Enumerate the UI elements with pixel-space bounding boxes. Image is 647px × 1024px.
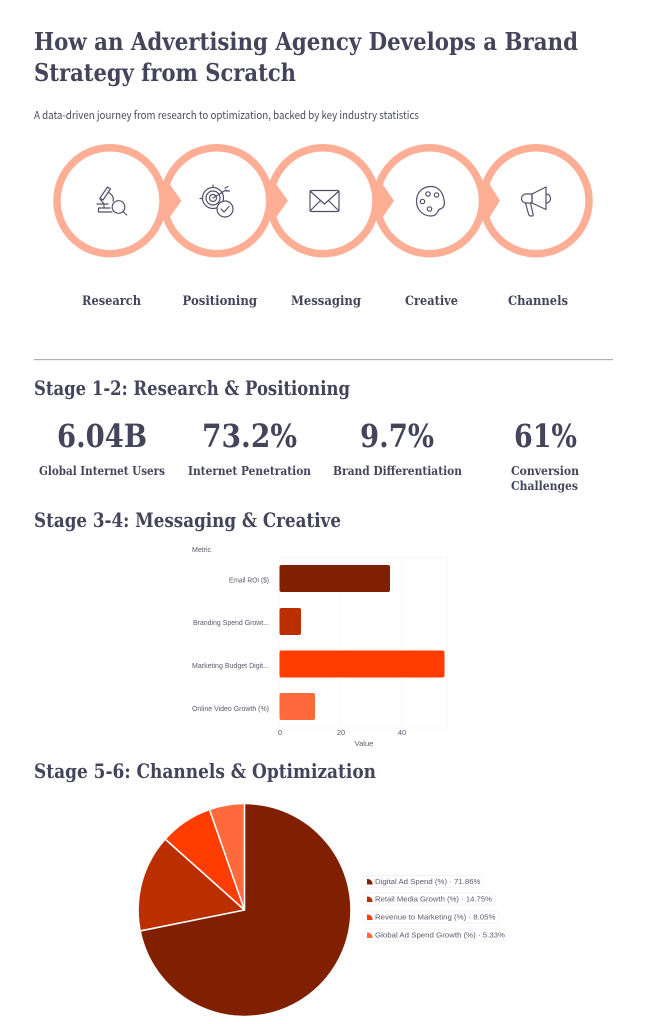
stat: conversion challenges: Challenges	[511, 479, 578, 493]
category labels: Branding Spend Growt...	[193, 620, 269, 627]
stat: brand differentiation: Brand Differentiation	[333, 464, 462, 478]
axis title: metric: Metric	[192, 547, 212, 554]
value axis: Value	[355, 739, 373, 748]
value axis: 0	[278, 728, 282, 737]
legend: global ad spend growth: Global Ad Spend Growth (%) · 5.33%	[375, 931, 505, 940]
title: Strategy from Scratch	[34, 58, 296, 87]
category labels: Online Video Growth (%)	[192, 706, 269, 713]
title: How an Advertising Agency Develops a Brand	[34, 27, 578, 56]
heading: stage 1-2: Stage 1-2: Research & Positioning	[34, 377, 350, 400]
arrow 4	[483, 184, 500, 218]
legend	[362, 876, 510, 941]
legend: digital ad spend	[362, 876, 484, 888]
icon: target with check	[200, 185, 233, 217]
ring: creative	[376, 148, 482, 254]
ring: research	[57, 148, 163, 254]
legend: global ad spend growth	[362, 929, 510, 941]
category labels: Email ROI ($)	[229, 578, 269, 584]
stat: conversion challenges: 61%	[514, 417, 577, 455]
ring: channels	[483, 148, 589, 254]
pie chart	[139, 804, 350, 1016]
icon: envelope	[310, 190, 339, 212]
process flow	[57, 148, 589, 309]
heading: stage 5-6: Stage 5-6: Channels & Optimization	[34, 760, 376, 783]
stat: internet penetration	[188, 417, 311, 478]
arrow 1	[163, 184, 182, 218]
legend: revenue to marketing: Revenue to Marketing (%) · 8.05%	[375, 913, 496, 922]
subtitle: A data-driven journey from research to optimization, backed by key industry statistics	[34, 107, 419, 123]
legend: retail media growth	[362, 893, 496, 905]
step labels: Positioning	[182, 294, 257, 309]
stat: conversion challenges	[511, 417, 579, 493]
stat: global internet users	[39, 417, 165, 478]
heading: stage 3-4: Stage 3-4: Messaging & Creative	[34, 509, 341, 532]
step labels: Messaging	[291, 294, 361, 309]
bar: branding spend	[280, 608, 301, 635]
stat: brand differentiation	[333, 417, 462, 478]
bar: email roi	[280, 565, 390, 592]
bar: marketing budget	[280, 650, 444, 678]
step labels	[82, 294, 568, 309]
category labels	[192, 578, 269, 713]
slice: revenue to marketing	[166, 810, 244, 910]
stat: brand differentiation: 9.7%	[360, 417, 434, 455]
title	[34, 27, 578, 87]
icon: palette	[416, 186, 444, 216]
stat: global internet users: 6.04B	[57, 417, 147, 455]
category labels: Marketing Budget Digit...	[192, 663, 269, 670]
legend: digital ad spend: Digital Ad Spend (%) · 71.86%	[375, 877, 481, 886]
legend: retail media growth: Retail Media Growth (%) · 14.75%	[375, 895, 492, 904]
step labels: Research	[82, 294, 141, 309]
stat: global internet users: Global Internet Users	[39, 464, 165, 478]
step labels: Channels	[508, 294, 568, 309]
legend: revenue to marketing	[362, 911, 500, 923]
bar chart	[192, 547, 448, 748]
stat: conversion challenges: Conversion	[511, 464, 579, 478]
bar: online video	[280, 693, 315, 720]
slice: digital ad spend	[141, 804, 350, 1016]
icon: megaphone	[522, 187, 550, 216]
slice: global ad spend growth	[210, 804, 244, 910]
value axis	[278, 728, 406, 748]
stat: internet penetration: Internet Penetration	[188, 464, 311, 478]
stat: internet penetration: 73.2%	[202, 417, 297, 455]
step labels: Creative	[405, 294, 458, 309]
value axis: 40	[398, 728, 406, 737]
value axis: 20	[337, 728, 345, 737]
arrow 3	[376, 184, 394, 218]
icon: microscope with magnifier	[97, 187, 127, 215]
ring: positioning	[164, 148, 270, 254]
slice: retail media growth	[139, 840, 244, 931]
arrow 2	[270, 184, 288, 218]
ring: messaging	[270, 148, 376, 254]
